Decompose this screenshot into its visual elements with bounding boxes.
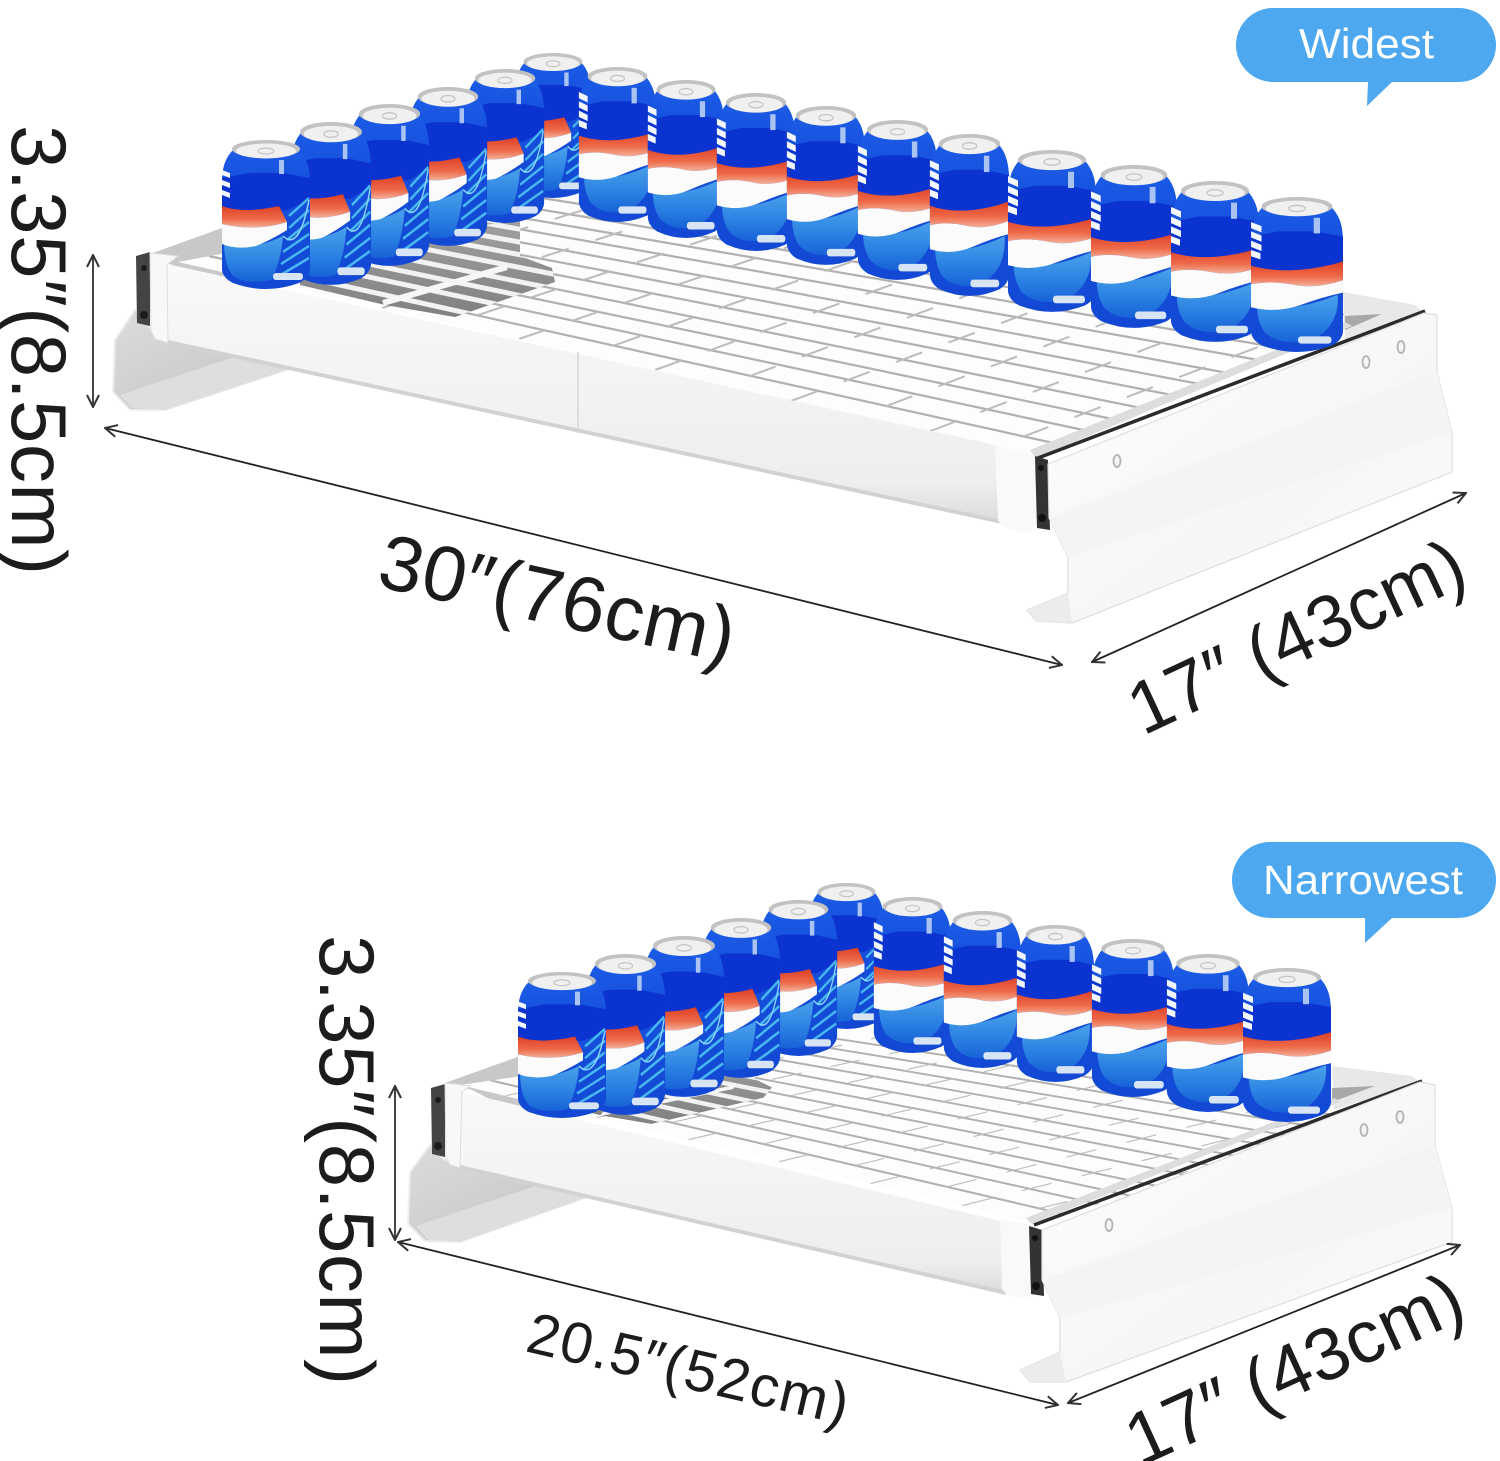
height label: 3.35″(8.5cm) xyxy=(303,935,391,1385)
callout: Narrowest: Narrowest xyxy=(1263,857,1464,903)
arrow: width 20.5 inch xyxy=(398,1242,1058,1405)
front right end cap xyxy=(995,445,1040,532)
right rail xyxy=(1030,292,1425,530)
right rail xyxy=(1026,1066,1422,1296)
front right end cap xyxy=(1000,1220,1034,1298)
arrow: depth 17 inch xyxy=(1068,1245,1460,1403)
depth label: 17″ (43cm) xyxy=(1115,522,1478,751)
callout: Widest xyxy=(1236,8,1496,106)
arrow: depth 17 inch xyxy=(1092,493,1466,662)
width label: 20.5″(52cm) xyxy=(521,1300,855,1437)
panel: widest shelf xyxy=(0,8,1496,751)
left rail interior xyxy=(445,1056,520,1115)
front rail xyxy=(150,253,1002,524)
front rail xyxy=(445,1083,1006,1295)
callout: Widest: Widest xyxy=(1299,20,1434,67)
callout: Narrowest xyxy=(1232,842,1496,943)
right bracket xyxy=(1027,313,1452,623)
cans row: 16 soda cans xyxy=(222,53,1343,352)
arrow: height xyxy=(394,1086,396,1240)
arrow: height xyxy=(92,255,94,407)
panel: narrowest shelf xyxy=(303,842,1500,1461)
right bracket xyxy=(1020,1082,1452,1382)
wire deck xyxy=(309,1006,1500,1227)
wire deck xyxy=(178,163,1380,455)
left bracket xyxy=(408,1084,590,1242)
arrow: width 30 inch xyxy=(105,428,1062,665)
width label: 30″(76cm) xyxy=(371,517,744,680)
left rail interior xyxy=(150,228,224,290)
cans row: 12 soda cans xyxy=(518,883,1331,1122)
left bracket xyxy=(113,252,298,410)
